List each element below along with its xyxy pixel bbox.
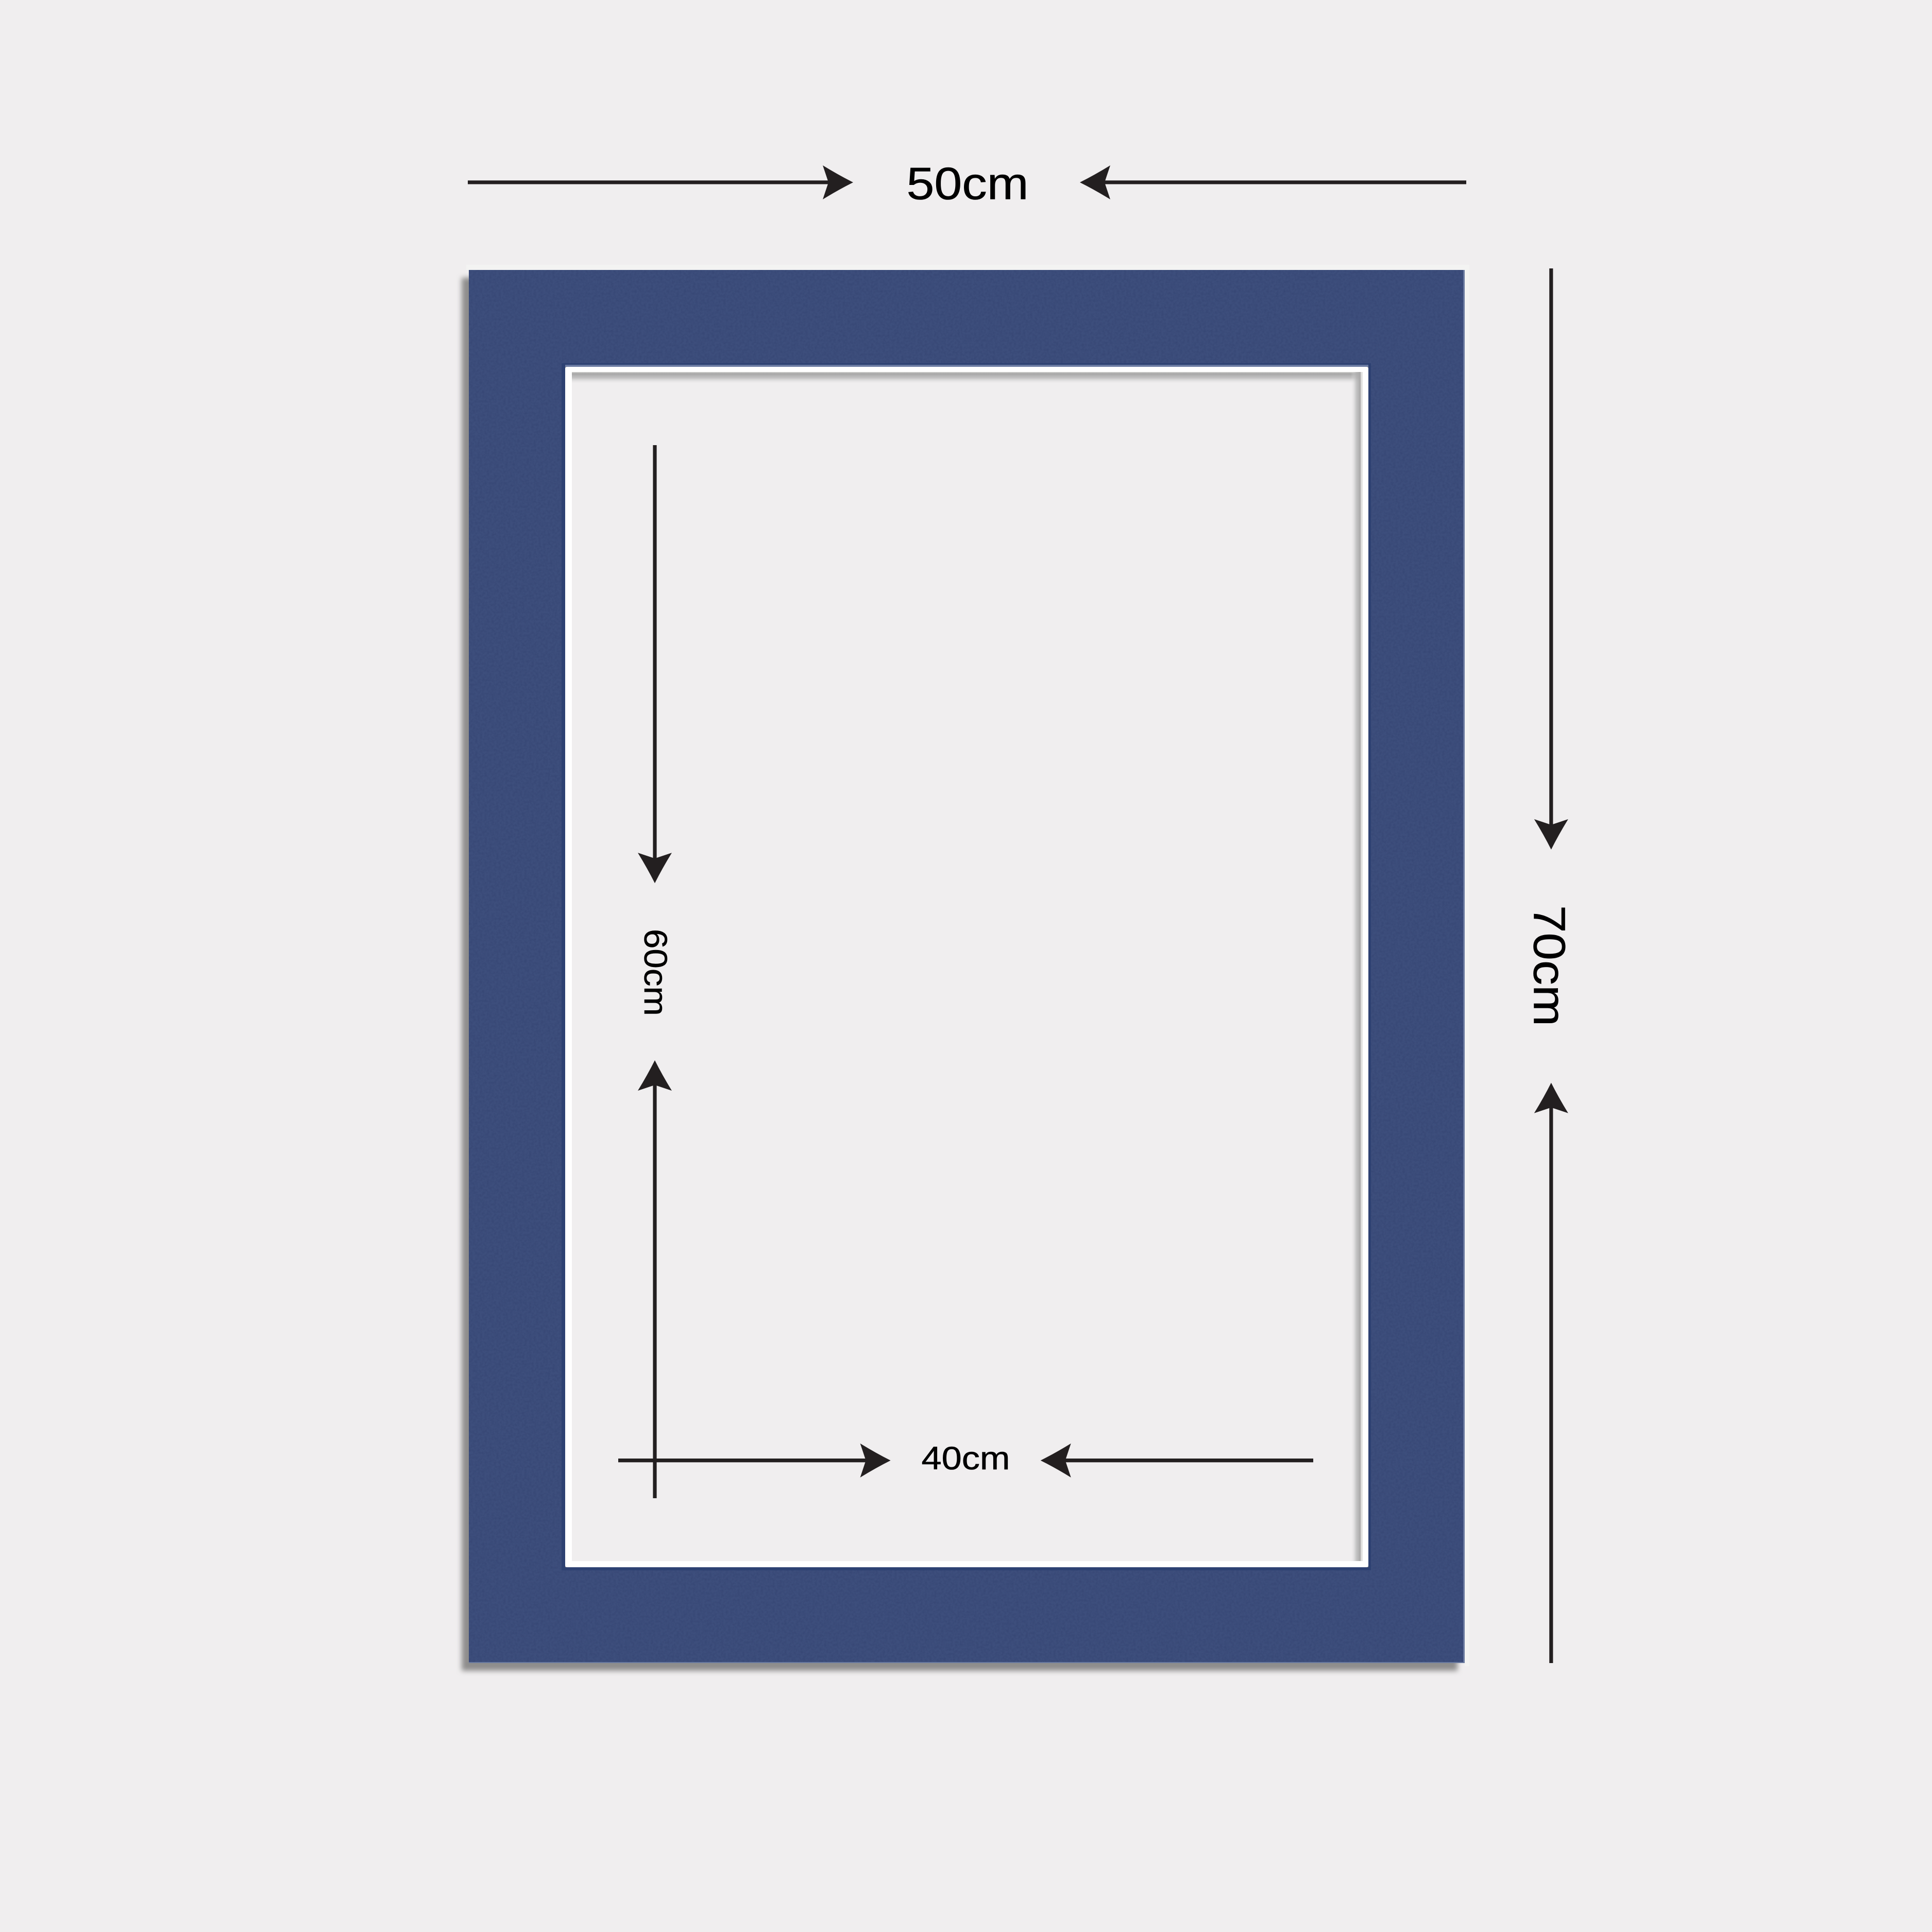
dimension: window width 40cm — [618, 1440, 1313, 1478]
arrow: top pointing down — [1534, 268, 1568, 850]
mat window top light strip — [565, 365, 1368, 367]
dimension: outer width 50cm — [468, 158, 1466, 209]
label: 60cm: 60cm — [637, 929, 673, 1016]
mat light outer edge — [469, 270, 1465, 1663]
mat board — [462, 265, 1469, 1671]
mat blue panel with window — [469, 270, 1465, 1663]
window interior — [572, 372, 1363, 1561]
arrow: bottom pointing up — [1534, 1083, 1568, 1663]
mat highlight edge — [466, 265, 1469, 1666]
dimension: outer height 70cm — [1524, 268, 1574, 1663]
arrow: bottom pointing up — [638, 1060, 672, 1498]
arrow: left pointing right — [618, 1444, 891, 1478]
mat paper texture — [469, 270, 1465, 1663]
inner shadow: right — [1351, 372, 1363, 1561]
white bevel — [565, 367, 1368, 1567]
mat drop shadow — [462, 278, 1458, 1671]
label: 70cm: 70cm — [1524, 905, 1574, 1026]
arrow: top pointing down — [638, 445, 672, 883]
arrow: right pointing left — [1080, 165, 1466, 199]
arrow: left pointing right — [468, 165, 853, 199]
arrow: right pointing left — [1041, 1444, 1313, 1478]
inner shadow: top — [572, 372, 1363, 384]
dimension: window height 60cm — [637, 445, 673, 1498]
mat window bevel shade — [562, 363, 1371, 1570]
label: 50cm: 50cm — [907, 158, 1028, 209]
label: 40cm: 40cm — [921, 1440, 1010, 1477]
